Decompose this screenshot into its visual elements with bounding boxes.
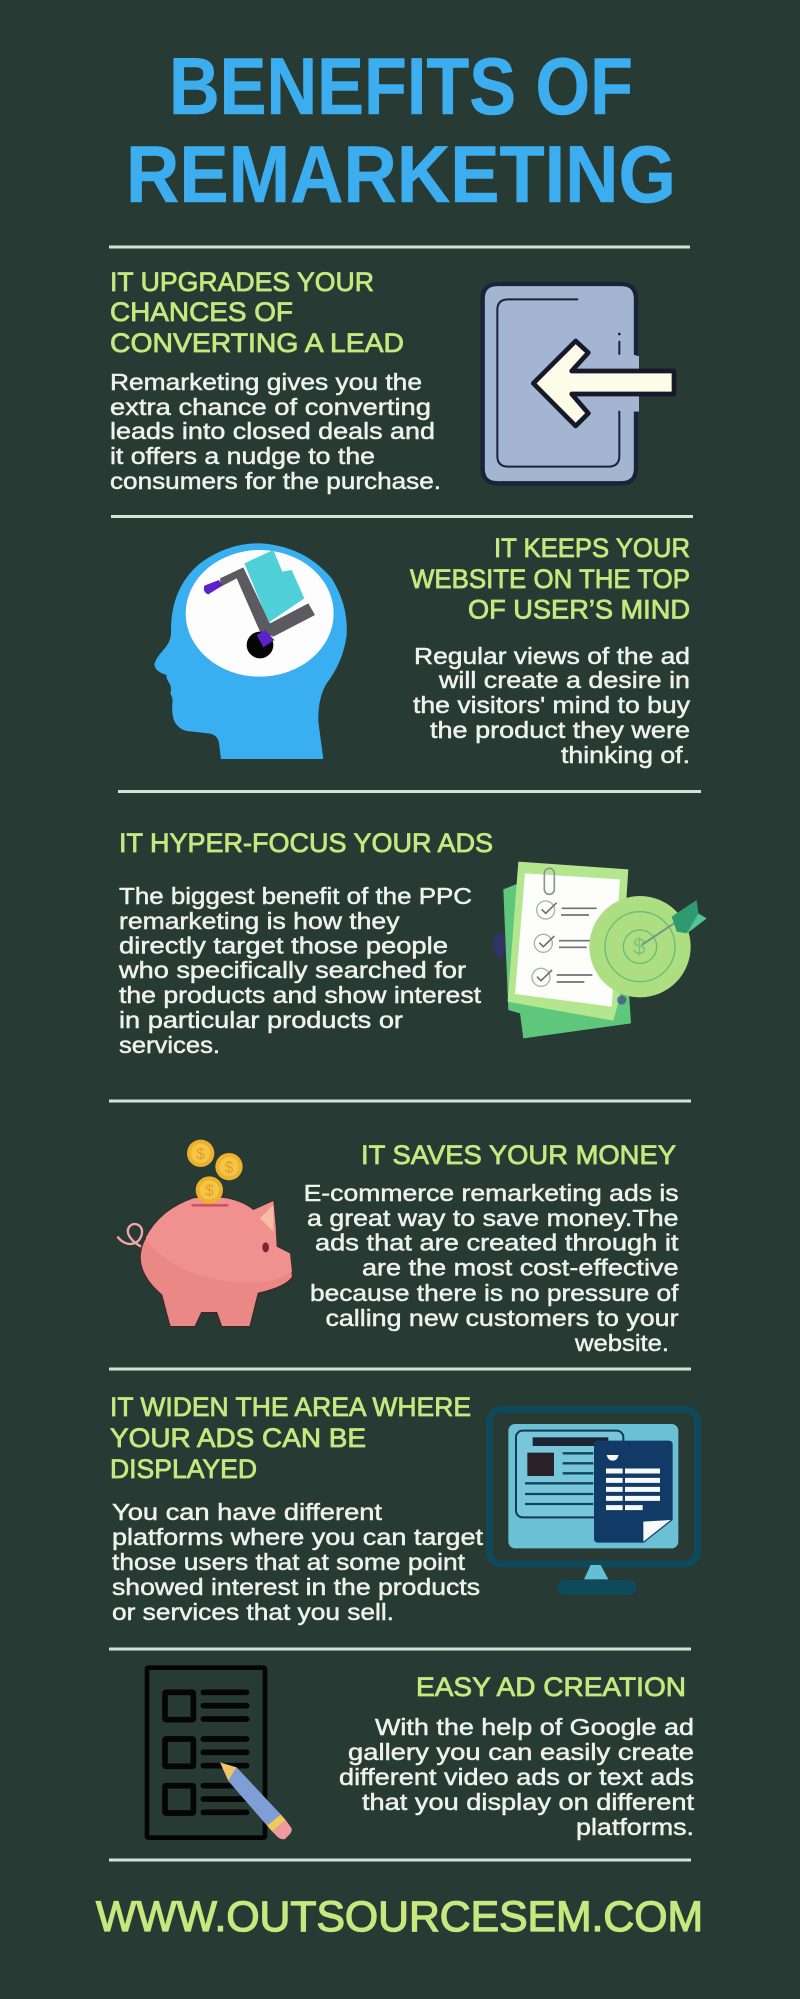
footer url: WWW.OUTSOURCESEM.COM [96, 1893, 703, 1941]
heading: hyper-focus: IT HYPER-FOCUS YOUR ADS [119, 828, 493, 858]
text block: top of mind: the product they were [430, 717, 690, 743]
panel: top of mind [154, 533, 691, 768]
text block: saves money: ads that are created through it [315, 1230, 679, 1256]
text block: widen display area: You can have different [112, 1499, 383, 1525]
text block: hyper-focus [118, 883, 482, 1058]
title: BENEFITS OF [169, 42, 633, 132]
icon: form with pencil [147, 1668, 292, 1839]
heading: widen display area: YOUR ADS CAN BE [110, 1423, 366, 1453]
heading: converting a lead: CONVERTING A LEAD [110, 328, 404, 358]
text block: saves money [304, 1180, 679, 1356]
text block: easy ad creation: platforms. [576, 1814, 694, 1840]
text block: easy ad creation [339, 1714, 695, 1840]
text block: saves money: because there is no pressure of [310, 1280, 679, 1306]
icon: piggy bank with coins: $ [196, 1146, 205, 1163]
text block: hyper-focus: who specifically searched for [118, 957, 466, 983]
heading: widen display area: IT WIDEN THE AREA WHERE [110, 1392, 471, 1422]
icon: phone with arrow [483, 284, 674, 483]
text block: converting a lead: Remarketing gives you the [110, 369, 422, 395]
heading: converting a lead: IT UPGRADES YOUR [110, 267, 374, 297]
text block: easy ad creation: With the help of Google ad [375, 1714, 694, 1740]
text block: hyper-focus: remarketing is how they [119, 908, 400, 934]
text block: top of mind: Regular views of the ad [414, 643, 690, 669]
icon: piggy bank with coins [117, 1140, 293, 1327]
text block: widen display area [112, 1499, 484, 1625]
panel: widen display area [110, 1392, 697, 1625]
icon: checklist and target: $ [633, 934, 646, 960]
text block: hyper-focus: services. [119, 1032, 220, 1058]
text block: widen display area: showed interest in the products [112, 1574, 480, 1600]
text block: easy ad creation: that you display on different [362, 1789, 695, 1815]
heading: widen display area: DISPLAYED [110, 1454, 257, 1484]
text block: saves money: are the most cost-effective [362, 1255, 678, 1281]
text block: widen display area: platforms where you can target [112, 1524, 484, 1550]
icon: monitor with documents [489, 1409, 697, 1595]
heading: top of mind: IT KEEPS YOUR [494, 533, 690, 563]
panel: saves money [117, 1140, 679, 1356]
heading: converting a lead [110, 267, 404, 358]
icon: piggy bank with coins: $ [225, 1159, 234, 1176]
text block: easy ad creation: different video ads or text ads [339, 1764, 694, 1790]
text block: hyper-focus: the products and show interest [119, 982, 482, 1008]
text block: converting a lead [110, 369, 441, 494]
text block: converting a lead: it offers a nudge to the [110, 443, 375, 469]
text block: easy ad creation: gallery you can easily create [348, 1739, 694, 1765]
text block: hyper-focus: directly target those people [119, 932, 448, 958]
panel: converting a lead [110, 267, 674, 494]
text block: saves money: calling new customers to your [326, 1305, 679, 1331]
heading: top of mind: WEBSITE ON THE TOP [410, 564, 690, 594]
heading: top of mind: OF USER’S MIND [468, 594, 690, 624]
heading: top of mind [410, 533, 690, 624]
text block: hyper-focus: The biggest benefit of the PPC [119, 883, 472, 909]
heading: easy ad creation: EASY AD CREATION [416, 1672, 686, 1702]
icon: piggy bank with coins: $ [205, 1183, 214, 1200]
text block: converting a lead: extra chance of converting [110, 394, 431, 420]
text block: widen display area: or services that you sell. [112, 1599, 394, 1625]
text block: saves money: website. [574, 1330, 669, 1356]
title: REMARKETING [126, 130, 676, 220]
text block: top of mind [413, 643, 691, 768]
panel: easy ad creation [147, 1668, 695, 1840]
text block: hyper-focus: in particular products or [119, 1007, 403, 1033]
title [126, 42, 676, 220]
panel: hyper-focus [118, 828, 707, 1058]
text block: saves money: a great way to save money.The [307, 1205, 678, 1231]
text block: top of mind: will create a desire in [438, 667, 690, 693]
text block: widen display area: those users that at some point [112, 1549, 466, 1575]
heading: widen display area [110, 1392, 471, 1484]
text block: saves money: E-commerce remarketing ads is [304, 1180, 679, 1206]
heading: saves money: IT SAVES YOUR MONEY [361, 1140, 676, 1170]
icon: checklist and target [493, 862, 707, 1038]
heading: converting a lead: CHANCES OF [110, 297, 293, 327]
text block: top of mind: thinking of. [561, 742, 690, 768]
text block: top of mind: the visitors' mind to buy [413, 692, 691, 718]
text block: converting a lead: consumers for the purchase. [110, 468, 441, 494]
icon: head with hand truck [154, 543, 347, 759]
text block: converting a lead: leads into closed deals and [110, 418, 435, 444]
